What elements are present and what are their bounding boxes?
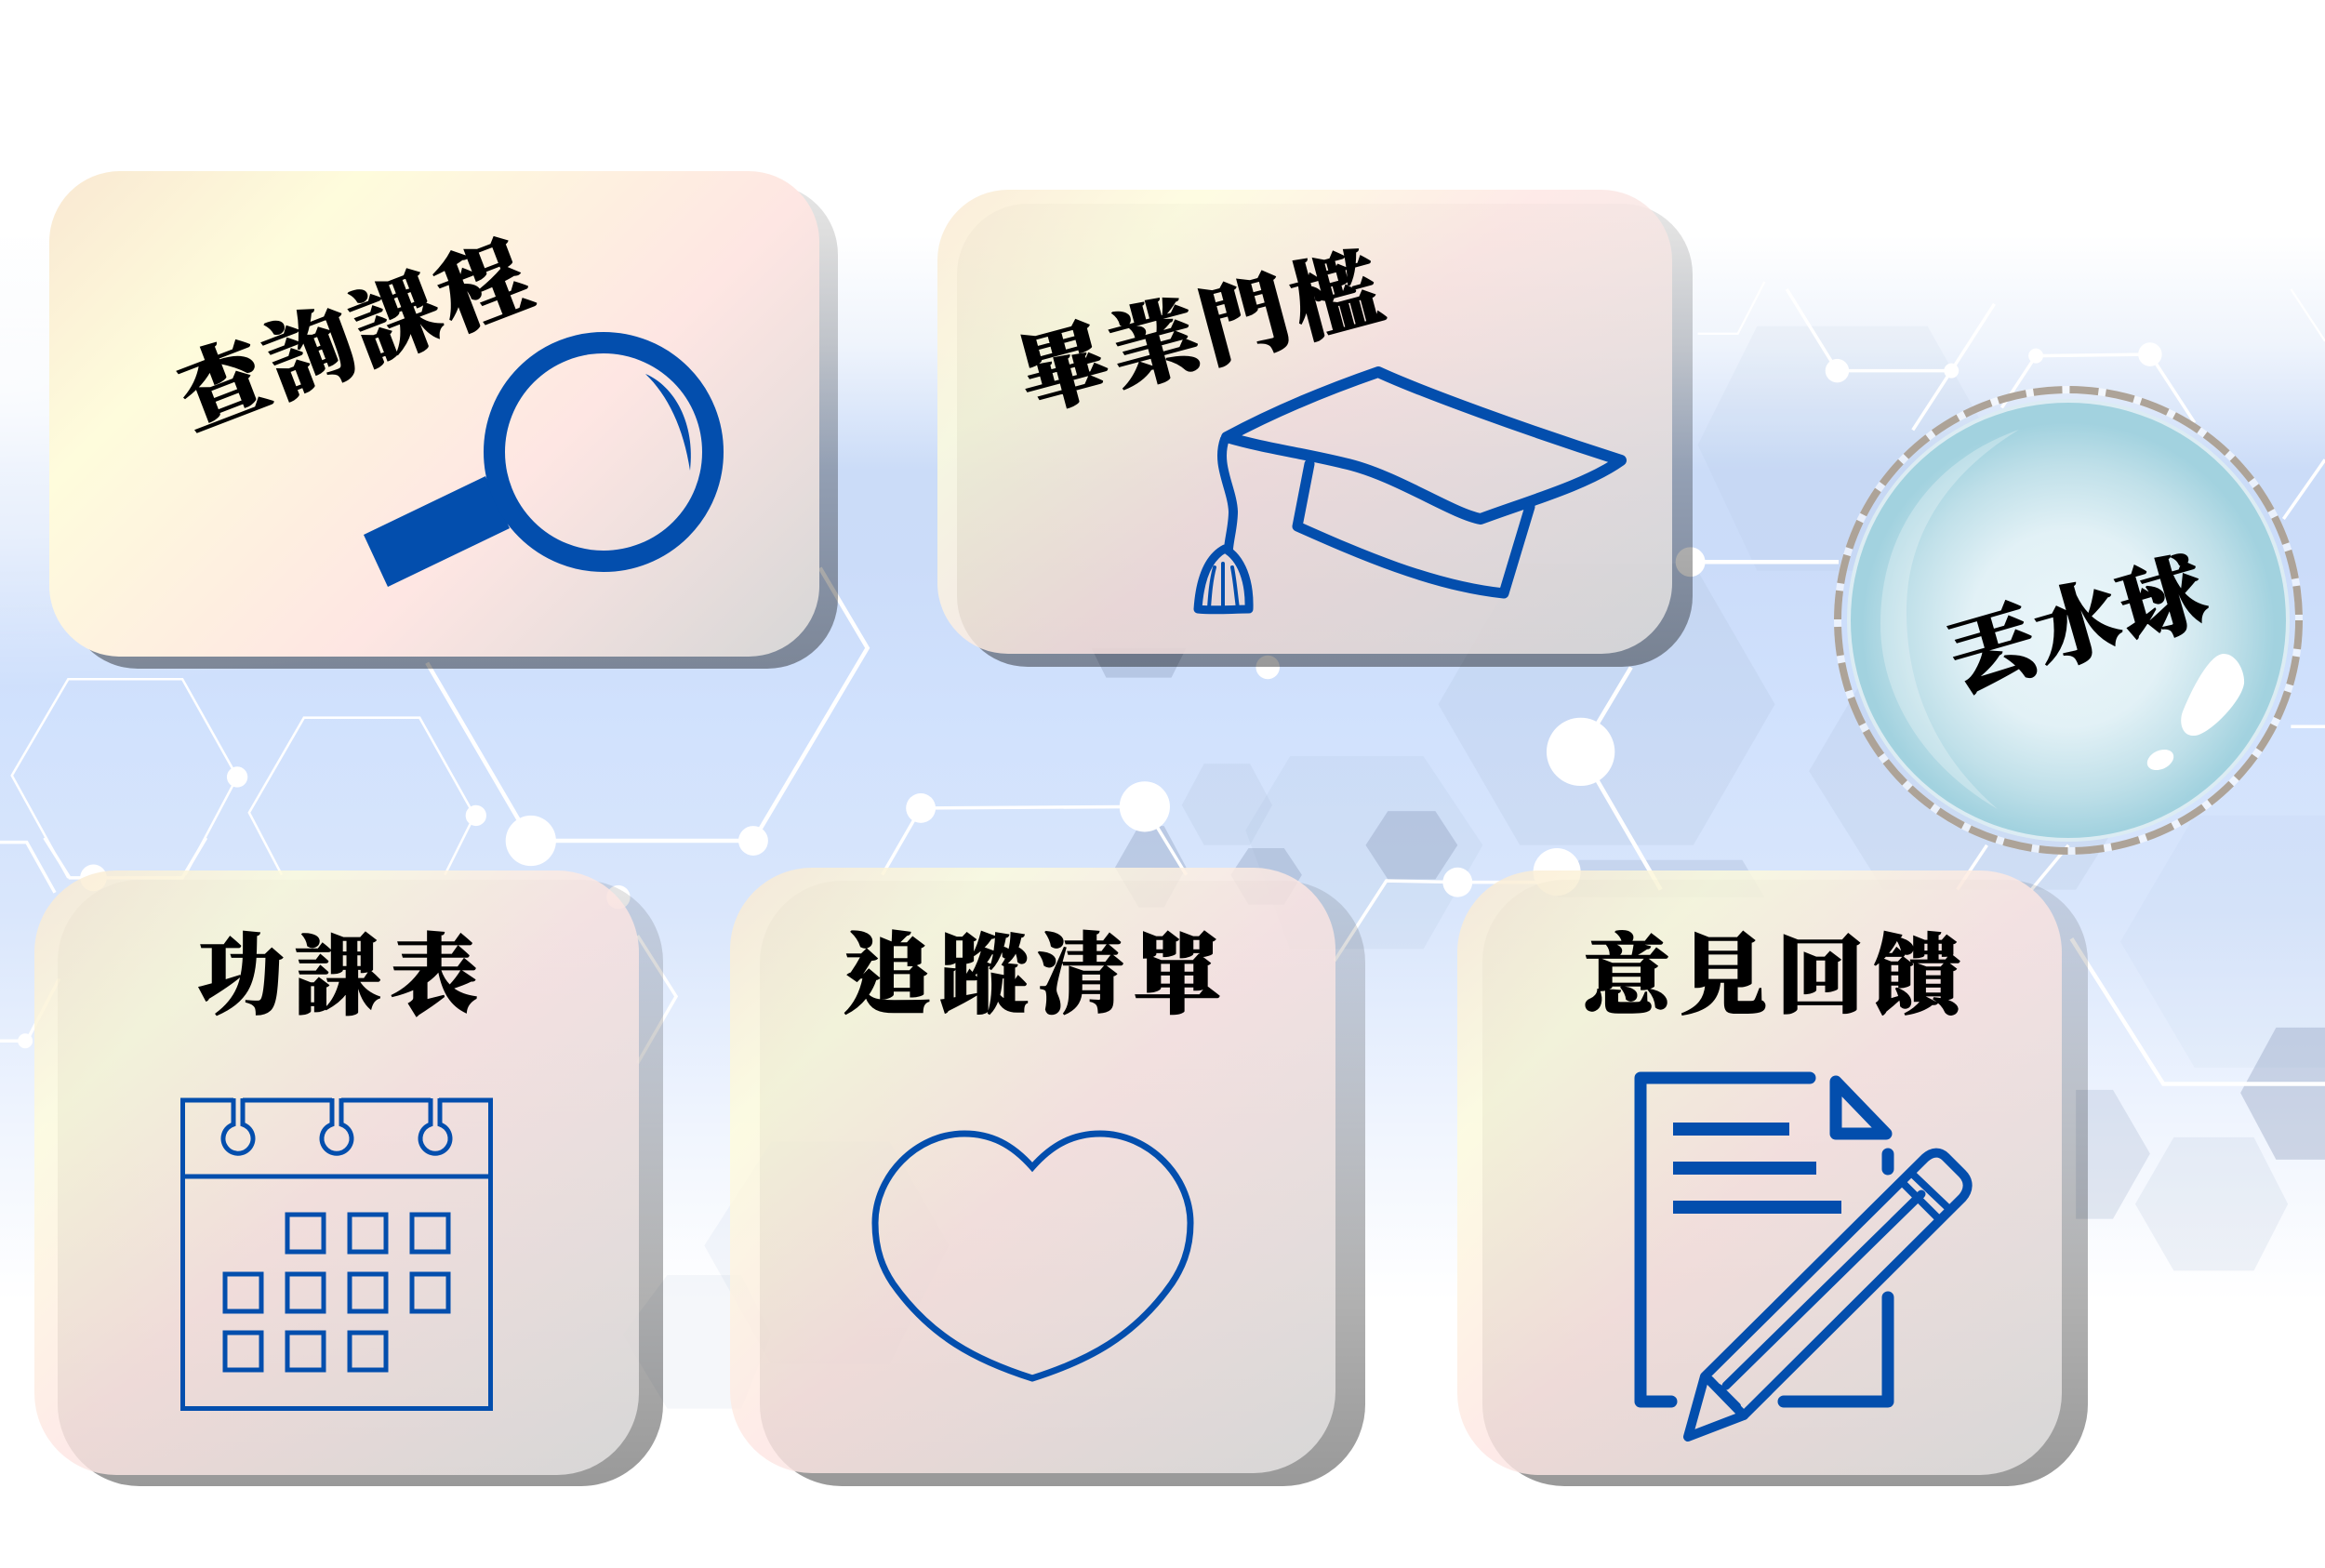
panel: 查詢課程 xyxy=(49,171,838,669)
panel: 畢業門檻 xyxy=(937,190,1693,667)
water ball button: 丟水球 xyxy=(1838,390,2299,851)
icon: document and pencil xyxy=(1641,1078,1968,1437)
icon: graduation cap xyxy=(1198,372,1621,610)
heading: 畢業門檻: 畢業門檻 xyxy=(1009,237,1398,429)
heading: 功課表: 功課表 xyxy=(197,929,487,1026)
panel: 功課表 xyxy=(34,870,663,1486)
icon: heart outline xyxy=(875,1134,1190,1378)
heading: 查詢課程: 查詢課程 xyxy=(166,225,547,448)
background hexagon network xyxy=(0,282,2325,1409)
icon: calendar xyxy=(182,1098,491,1408)
heading: 丟水球: 丟水球 xyxy=(1939,544,2220,708)
icon: magnifying glass xyxy=(364,342,712,587)
panel: 追蹤清單 xyxy=(730,868,1365,1486)
panel: 意見回饋 xyxy=(1457,870,2088,1486)
heading: 意見回饋: 意見回饋 xyxy=(1583,927,1970,1026)
heading: 追蹤清單: 追蹤清單 xyxy=(844,928,1230,1025)
